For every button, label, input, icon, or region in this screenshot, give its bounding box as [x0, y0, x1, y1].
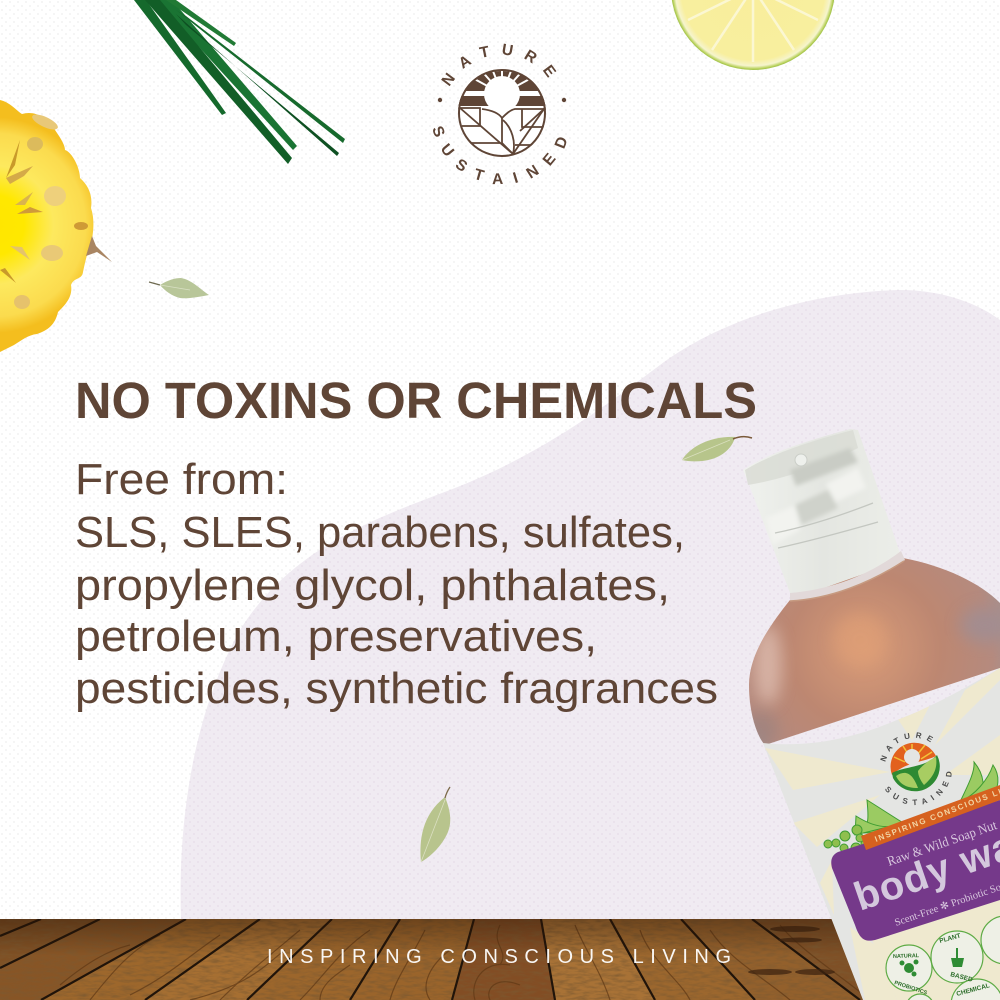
leaf: upper left	[149, 278, 209, 298]
badge: chemical: CHEMICAL	[956, 982, 991, 998]
planks	[0, 919, 863, 1000]
pineapple stem	[86, 236, 112, 262]
bottle label	[764, 668, 1000, 1000]
footer tagline: INSPIRING CONSCIOUS LIVING	[267, 946, 731, 968]
body text: propylene glycol, phthalates,	[75, 561, 670, 610]
logo emblem	[458, 71, 546, 154]
body text: SLS, SLES, parabens, sulfates,	[75, 508, 685, 557]
body text	[75, 455, 718, 713]
leaf: lower	[420, 787, 450, 862]
badge: natural probiotics: NATURAL	[893, 953, 920, 960]
badge: plant based	[939, 933, 974, 984]
logo text ring: NATURE	[441, 44, 556, 86]
logo text ring: SUSTAINED	[433, 126, 566, 184]
lilac blob	[181, 290, 1000, 920]
badge: natural probiotics	[893, 953, 928, 997]
label badges	[886, 916, 1000, 1000]
logo	[433, 44, 566, 184]
lime segment lines	[688, 0, 818, 62]
bottle	[745, 429, 1000, 1000]
badge: natural probiotics: PROBIOTICS	[893, 980, 928, 997]
label logo text: SUSTAINED	[885, 772, 952, 806]
logo dots	[438, 98, 442, 102]
label soap nut berries	[824, 824, 864, 851]
leaf: centre right	[682, 437, 752, 461]
logo leaves	[458, 106, 546, 154]
logo text ring	[433, 44, 566, 184]
knots	[748, 926, 835, 975]
badge icons	[900, 948, 964, 976]
pineapple eyes	[0, 112, 88, 309]
label logo text	[880, 732, 952, 806]
lime slice	[671, 0, 835, 70]
label orange ribbon	[861, 785, 1000, 850]
label green leaves	[855, 762, 998, 835]
body text: pesticides, synthetic fragrances	[75, 664, 718, 713]
wood floor	[0, 919, 863, 1000]
badge: plant based: BASED	[949, 971, 974, 984]
label logo text: NATURE	[880, 732, 934, 762]
badge: plant based: PLANT	[939, 933, 961, 945]
wood plank gaps	[0, 919, 860, 1000]
chives	[134, 0, 345, 164]
wood grain	[45, 919, 856, 1000]
body text: petroleum, preservatives,	[75, 612, 597, 661]
pineapple slice	[0, 100, 112, 352]
bottle liquid body	[749, 558, 1000, 744]
body text: Free from:	[75, 455, 288, 504]
label purple band	[831, 800, 1000, 941]
heading: NO TOXINS OR CHEMICALS	[75, 372, 757, 429]
label sunburst	[765, 668, 1000, 1000]
label logo	[880, 732, 952, 806]
bottle cap	[743, 429, 905, 601]
